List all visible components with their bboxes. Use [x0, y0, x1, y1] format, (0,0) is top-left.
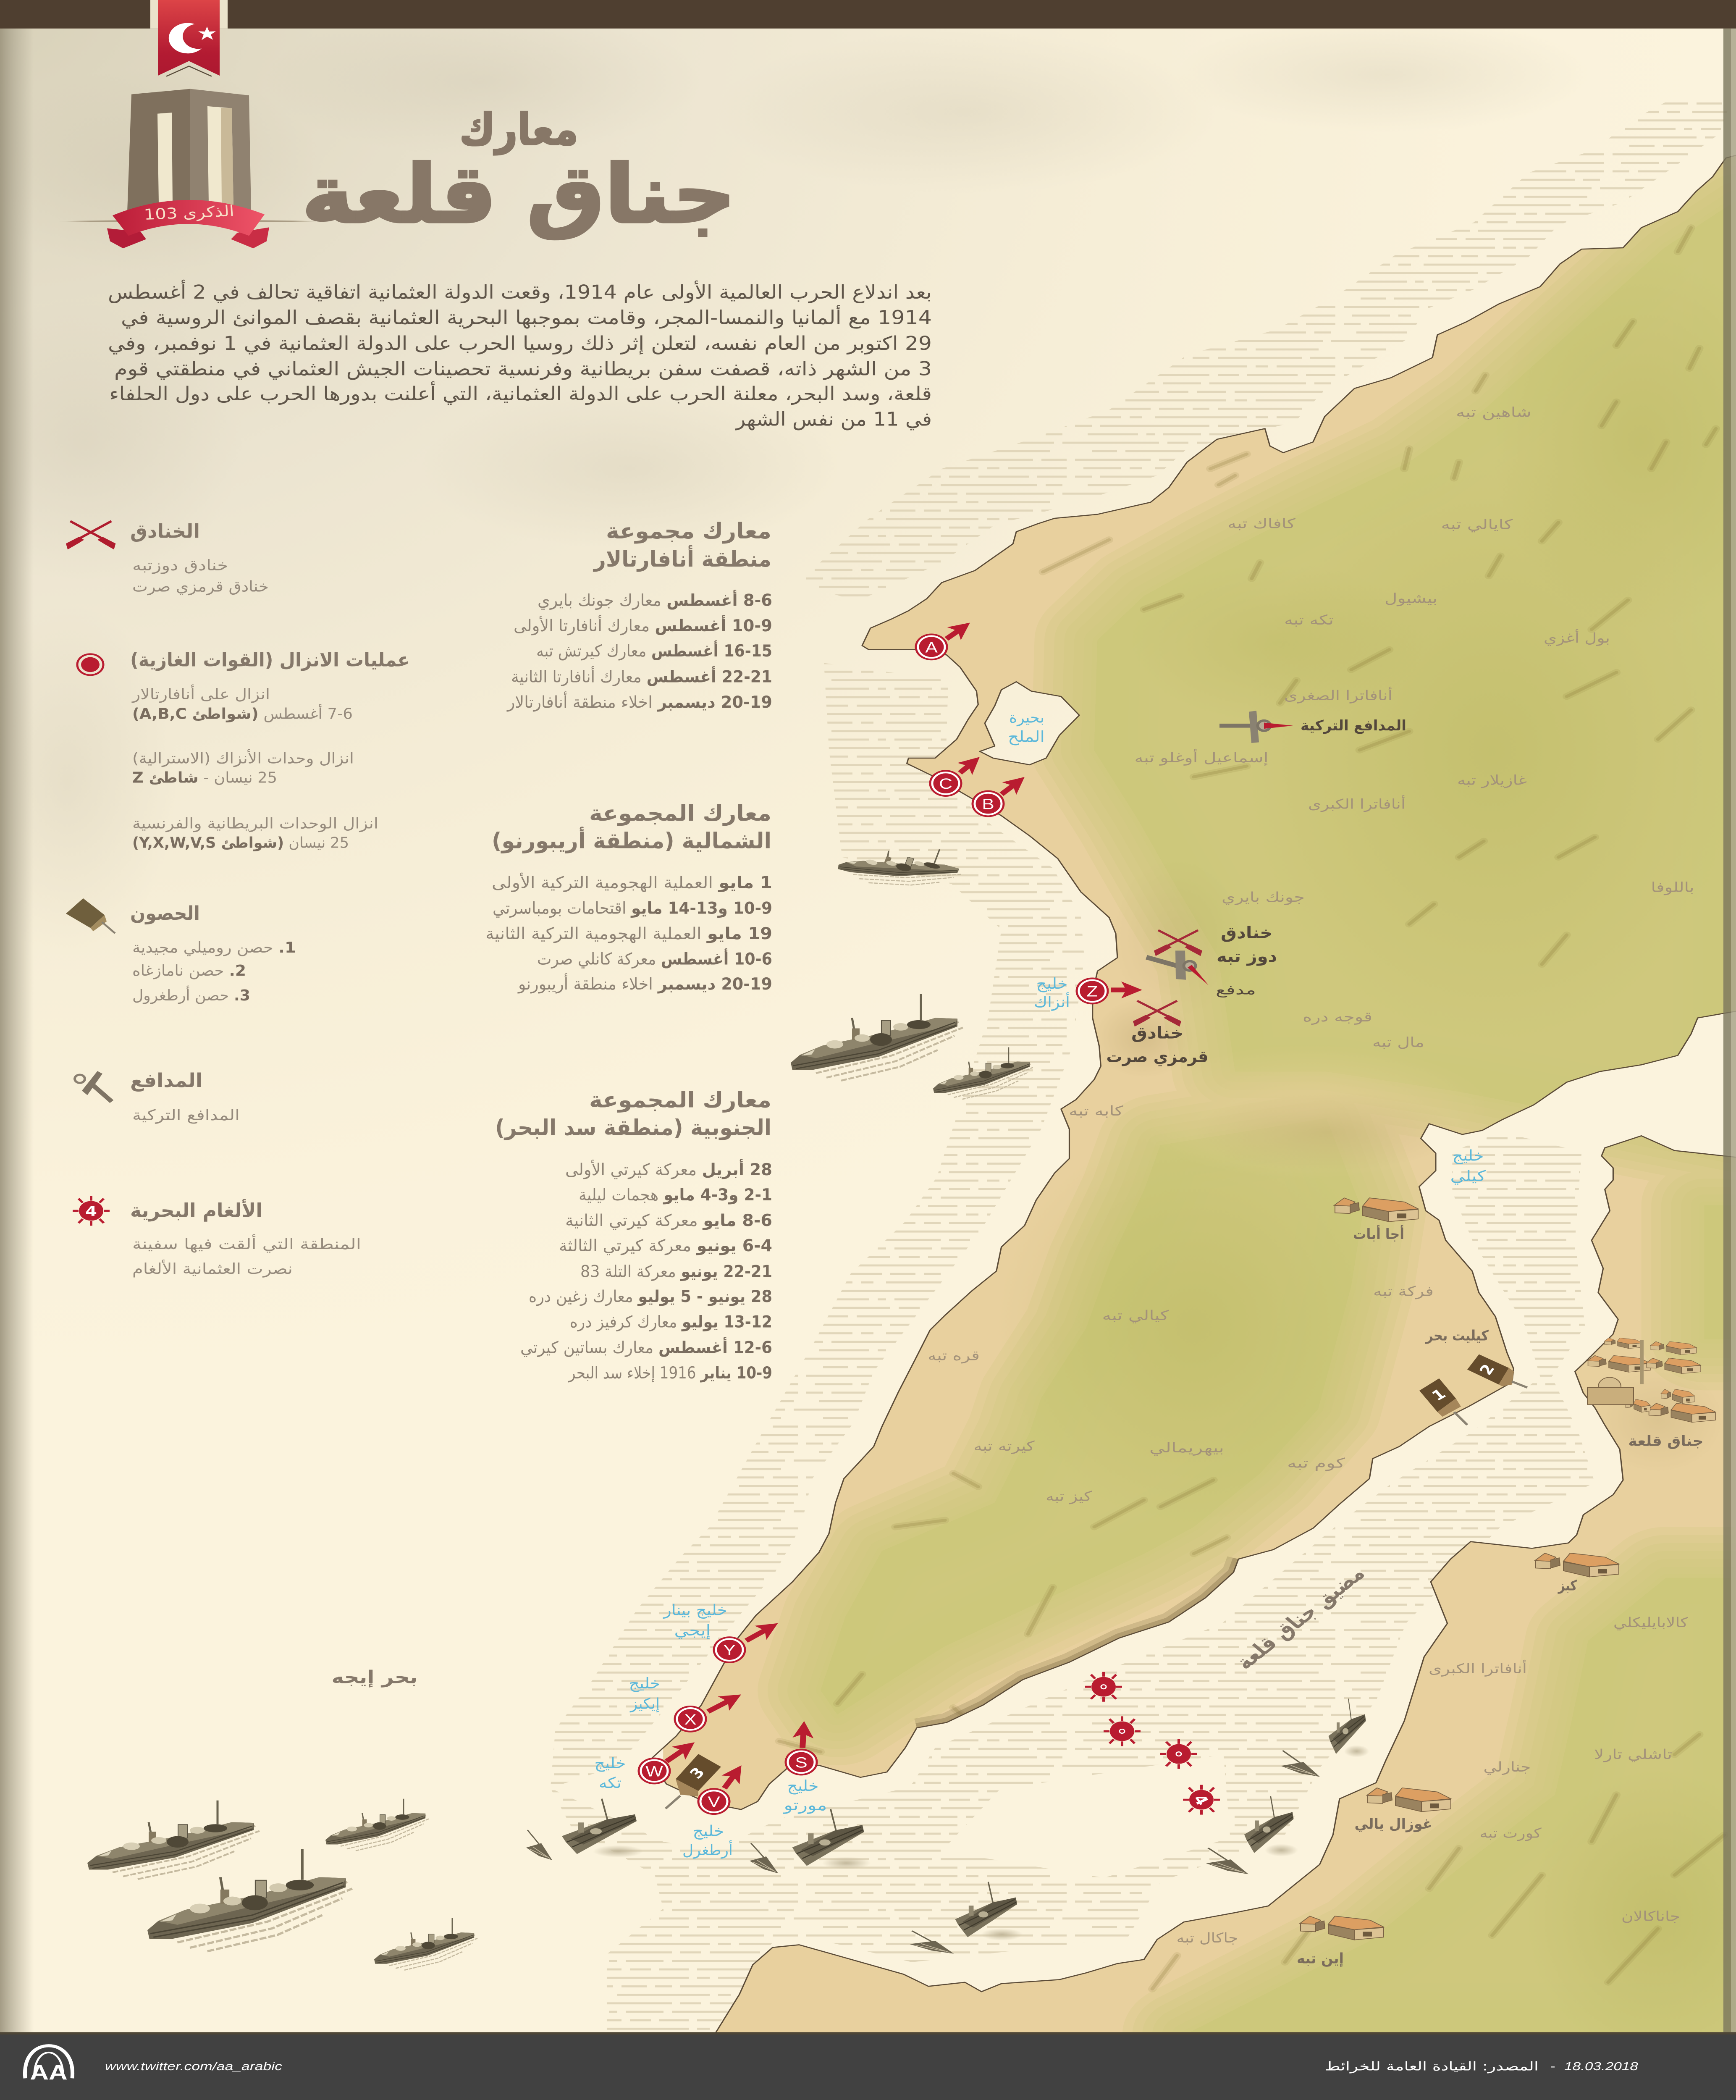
battles list: Anafartalar group: 22-21 أغسطس معارك أنافارتا الثانية: [511, 666, 772, 686]
icon: martyrs memorial with anniversary banner: الذكرى 103: [144, 202, 235, 223]
battles list: northern group: 20-19 ديسمبر اخلاء منطقة أريبورنو: [517, 973, 772, 994]
icon: landing target: [77, 654, 103, 675]
map labels: place names: تكه تبه: [1284, 612, 1334, 628]
legend: landing operations: عمليات الانزال (القوات الغازية): [130, 649, 410, 671]
landing markers: A: [925, 639, 938, 656]
legend: forts: 1. حصن روميلي مجيدية: [132, 939, 296, 956]
landing markers: Y: [723, 1642, 736, 1659]
map labels: highlighted sites: المدافع التركية: [1301, 718, 1406, 734]
map labels: place names: كيالي تبه: [1102, 1307, 1169, 1323]
map labels: place names: كافاك تبه: [1227, 515, 1296, 532]
map labels: bays and lake: خليج: [595, 1755, 626, 1772]
icon: crossed rifles: [66, 521, 115, 549]
legend: naval mines: نصرت العثمانية الألغام: [132, 1259, 293, 1278]
battles list: Anafartalar group: [506, 518, 772, 712]
warships: Aegean fleet: [87, 1799, 477, 1970]
legend: trenches: [66, 520, 269, 596]
map labels: place names: كيز تبه: [1046, 1488, 1092, 1504]
fort 1: 1: [1428, 1386, 1449, 1404]
map labels: place names: كيرته تبه: [973, 1438, 1035, 1454]
title: [302, 105, 736, 241]
map labels: highlighted sites: كبز: [1558, 1578, 1577, 1594]
map labels: highlighted sites: قرمزي صرت: [1106, 1047, 1208, 1066]
map labels: bays and lake: كيلي: [1450, 1168, 1487, 1185]
map labels: highlighted sites: دوز تبه: [1217, 947, 1277, 966]
map labels: highlighted sites: بحر إيجه: [331, 1667, 417, 1688]
map labels: place names: كايالي تبه: [1441, 516, 1513, 532]
icon: cannon: [75, 1071, 112, 1102]
legend: trenches: الخنادق: [130, 520, 200, 543]
battles list: southern group: [495, 1087, 772, 1383]
map labels: bays and lake: خليج: [787, 1777, 818, 1795]
legend: landing operations: 7-6 أغسطس (شواطئ A,B,C): [132, 704, 353, 723]
battles list: northern group: [485, 801, 772, 994]
map labels: bays and lake: [595, 709, 1487, 1859]
map labels: highlighted sites: [331, 718, 1703, 1967]
icon: Turkish artillery marker: [1219, 711, 1293, 743]
battles list: Anafartalar group: 16-15 أغسطس معارك كيرتش تبه: [536, 640, 772, 661]
fort 2: [1467, 1354, 1527, 1388]
sinking ships: [526, 1698, 1369, 1954]
legend: forts: الحصون: [130, 903, 200, 924]
map labels: bays and lake: بحيرة: [1009, 709, 1044, 726]
logo: AA: AA: [30, 2061, 68, 2084]
battles list: Anafartalar group: منطقة أنافارتالار: [593, 545, 771, 572]
battles list: southern group: 8-6 مايو معركة كيرتي الثانية: [565, 1212, 772, 1230]
map labels: bays and lake: خليج: [1452, 1147, 1484, 1164]
map labels: place names: بيهريمالي: [1149, 1440, 1224, 1456]
map labels: bays and lake: تكه: [599, 1774, 621, 1792]
landing markers: S: [795, 1754, 808, 1771]
map labels: bays and lake: خليج: [692, 1823, 724, 1840]
map labels: bays and lake: إيكيز: [629, 1696, 660, 1713]
legend: landing operations: 25 نيسان - شاطئ Z: [132, 769, 277, 786]
icon: mine: 4: [85, 1203, 97, 1219]
map labels: place names: جنارلي: [1483, 1759, 1531, 1775]
naval mines on map: 4: [1189, 1792, 1212, 1808]
battles list: southern group: 13-12 يوليو معارك كرفيز دره: [570, 1313, 772, 1332]
battles list: northern group: الشمالية (منطقة أريبورنو): [492, 827, 771, 854]
legend: landing operations: 25 نيسان (شواطئ Y,X,W,V,S): [132, 835, 349, 851]
battles list: southern group: 28 أبريل معركة كيرتي الأولى: [565, 1159, 772, 1179]
legend: artillery: المدافع: [130, 1070, 202, 1092]
battles list: southern group: 10-9 يناير 1916 إخلاء سد البحر: [568, 1364, 772, 1383]
map labels: place names: بيشيول: [1385, 590, 1437, 606]
footer: 18.03.2018: [1564, 2060, 1638, 2073]
map labels: place names: أنافاترا الكبرى: [1308, 795, 1406, 812]
top bar: [0, 0, 1736, 29]
map labels: bays and lake: أرطغرل: [682, 1840, 733, 1859]
map labels: place names: كالابايليكلي: [1613, 1614, 1689, 1630]
map labels: place names: جونك بايري: [1222, 889, 1305, 905]
landing markers: W: [645, 1763, 663, 1780]
battles list: southern group: 22-21 يونيو معركة التلة 83: [580, 1263, 772, 1281]
legend: naval mines: الألغام البحرية: [130, 1199, 262, 1222]
map labels: place names: فركة تبه: [1373, 1283, 1434, 1299]
map labels: place names: جاكال تبه: [1177, 1930, 1238, 1946]
legend: landing operations: انزال وحدات الأنزاك (الاسترالية): [132, 749, 354, 767]
intro paragraph: 1914 مع ألمانيا والنمسا-المجر، وقامت بموجبها البحرية العثمانية بقصف الموانئ الروسية في: [121, 305, 932, 329]
legend: forts: [66, 898, 296, 1004]
battles list: northern group: 1 مايو العملية الهجومية التركية الأولى: [492, 872, 772, 892]
fort 1: [1419, 1378, 1467, 1425]
fort 3: 3: [686, 1764, 708, 1782]
icon: trenches on map: [1133, 930, 1202, 1026]
legend: forts: 2. حصن نامازغاه: [132, 962, 246, 979]
legend: trenches: خنادق قرمزي صرت: [132, 578, 269, 596]
ribbon: Turkish flag: [150, 0, 228, 76]
map labels: place names: شاهين تبه: [1456, 404, 1531, 420]
footer: المصدر: القيادة العامة للخرائط: [1325, 2059, 1539, 2074]
legend: artillery: المدافع التركية: [132, 1107, 240, 1124]
map labels: place names: أنافاترا الكبرى: [1429, 1660, 1527, 1677]
map labels: place names: مال تبه: [1372, 1034, 1424, 1050]
map labels: highlighted sites: خنادق: [1221, 924, 1273, 942]
icon: fort: [66, 898, 115, 933]
battles list: northern group: 10-6 أغسطس معركة كانلي صرت: [537, 948, 772, 969]
landing markers: [639, 631, 1126, 1814]
map labels: bays and lake: إيجي: [674, 1622, 711, 1639]
map labels: place names: إسماعيل أوغلو تبه: [1135, 749, 1268, 766]
legend: naval mines: المنطقة التي ألقت فيها سفينة: [132, 1234, 361, 1253]
battles list: Anafartalar group: معارك مجموعة: [606, 518, 771, 544]
battles list: northern group: 19 مايو العملية الهجومية التركية الثانية: [485, 924, 772, 943]
legend: landing operations: [77, 649, 410, 851]
landing markers: V: [708, 1794, 720, 1810]
landing markers: X: [684, 1712, 697, 1728]
logo: AA: [25, 2046, 73, 2084]
terrain ridges: [779, 228, 1724, 1989]
map labels: place names: كابه تبه: [1069, 1103, 1124, 1119]
battles list: southern group: 6-4 يونيو معركة كيرتي الثالثة: [559, 1236, 772, 1255]
map labels: place names: باللوفا: [1651, 879, 1694, 895]
map labels: place names: كورت تبه: [1480, 1825, 1542, 1841]
map labels: place names: غازيلار تبه: [1457, 772, 1527, 788]
footer: www.twitter.com/aa_arabic: [105, 2060, 283, 2073]
intro paragraph: 3 من الشهر ذاته، قصفت سفن بريطانية وفرنسية تحصينات الجيش العثماني في منطقتي قوم: [114, 358, 932, 380]
battles list: Anafartalar group: 10-9 أغسطس معارك أنافارتا الأولى: [514, 615, 772, 635]
icon: mine: [73, 1196, 110, 1226]
icon: field gun marker: [1146, 950, 1209, 985]
map labels: bays and lake: مورتو: [783, 1797, 827, 1814]
map labels: bays and lake: أنزاك: [1034, 992, 1070, 1011]
battles list: southern group: 12-6 أغسطس معارك بساتين كيرتي: [520, 1337, 772, 1357]
villages: [1300, 1198, 1619, 1940]
intro paragraph: قلعة، وسد البحر، معلنة الحرب على الدولة العثمانية، التي أعلنت بدورها الحرب على دول الحلفاء: [109, 381, 932, 405]
map labels: place names: [928, 404, 1694, 1946]
intro paragraph: 29 اكتوبر من العام نفسه، لتعلن إثر ذلك روسيا الحرب على الدولة العثمانية في 1 نوفمبر، وفي: [108, 333, 932, 354]
map labels: highlighted sites: إين تبه: [1297, 1950, 1344, 1967]
map labels: place names: قره تبه: [928, 1347, 980, 1363]
legend: trenches: خنادق دوزتبه: [132, 557, 228, 574]
battles list: southern group: الجنوبية (منطقة سد البحر): [495, 1115, 771, 1141]
landing markers: B: [982, 796, 994, 812]
map labels: highlighted sites: مدفع: [1216, 983, 1256, 998]
battles list: southern group: 2-1 و3-4 مايو هجمات ليلية: [579, 1186, 772, 1205]
landing markers: C: [939, 776, 952, 792]
battles list: Anafartalar group: 8-6 أغسطس معارك جونك بايري: [538, 590, 772, 610]
map labels: highlighted sites: كيليت بحر: [1425, 1328, 1489, 1344]
footer: -: [1550, 2060, 1555, 2073]
map: land masses: [650, 121, 1736, 2063]
map labels: bays and lake: خليج: [629, 1675, 661, 1692]
map labels: bays and lake: خليج: [1036, 975, 1067, 992]
map labels: highlighted sites: جناق قلعة: [1628, 1433, 1703, 1450]
fort 3: [666, 1754, 721, 1809]
title: معارك: [459, 105, 578, 155]
legend: artillery: [75, 1070, 240, 1124]
intro paragraph: بعد اندلاع الحرب العالمية الأولى عام 1914، وقعت الدولة العثمانية اتفاقية تحالف في 2 أغسطس: [108, 280, 932, 303]
legend: landing operations: انزال الوحدات البريطانية والفرنسية: [132, 815, 378, 832]
map labels: highlighted sites: خنادق: [1131, 1024, 1183, 1042]
title: جناق قلعة: [302, 148, 736, 241]
map labels: place names: تاشلي تارلا: [1594, 1746, 1672, 1762]
legend: landing operations: انزال على أنافارتالار: [131, 684, 270, 703]
map labels: place names: كوم تبه: [1287, 1455, 1345, 1471]
map labels: place names: جاناكالان: [1621, 1908, 1680, 1924]
right paper edge: [1723, 29, 1736, 2034]
coast shadow: [917, 1559, 1238, 1728]
naval mines on map: [1085, 1672, 1220, 1815]
water hatching: [551, 102, 1723, 2030]
battles list: southern group: معارك المجموعة: [589, 1087, 771, 1113]
Canakkale town: [1587, 1338, 1715, 1422]
battles list: Anafartalar group: 20-19 ديسمبر اخلاء منطقة أنافارتالار: [506, 691, 772, 712]
legend: naval mines: [73, 1196, 361, 1278]
legend: forts: 3. حصن أرطغرول: [132, 986, 250, 1004]
icon: martyrs memorial with anniversary banner: [58, 89, 321, 248]
map labels: place names: بول أغزي: [1544, 629, 1610, 646]
warships: off Ari Burnu: [791, 828, 1033, 1099]
map labels: bays and lake: خليج بينار: [663, 1602, 727, 1619]
map labels: place names: أنافاترا الصغرى: [1284, 687, 1392, 704]
battles list: southern group: 28 يونيو - 5 يوليو معارك زغين دره: [529, 1288, 772, 1306]
fort 2: 2: [1476, 1362, 1499, 1378]
map labels: place names: قوجه دره: [1303, 1009, 1372, 1025]
landing markers: Z: [1087, 983, 1098, 1000]
map labels: highlighted sites: أجا أبات: [1353, 1225, 1404, 1243]
map labels: highlighted sites: مضيق جناق قلعة: [1231, 1562, 1370, 1674]
map labels: bays and lake: الملح: [1008, 728, 1045, 746]
footer: [0, 2032, 1736, 2100]
intro paragraph: في 11 من نفس الشهر: [734, 409, 932, 430]
intro paragraph: [108, 280, 932, 430]
map labels: highlighted sites: غوزال يالي: [1355, 1816, 1432, 1832]
battles list: northern group: 10-9 و13-14 مايو اقتحامات بومباسرتي: [493, 899, 772, 918]
battles list: northern group: معارك المجموعة: [589, 801, 771, 826]
